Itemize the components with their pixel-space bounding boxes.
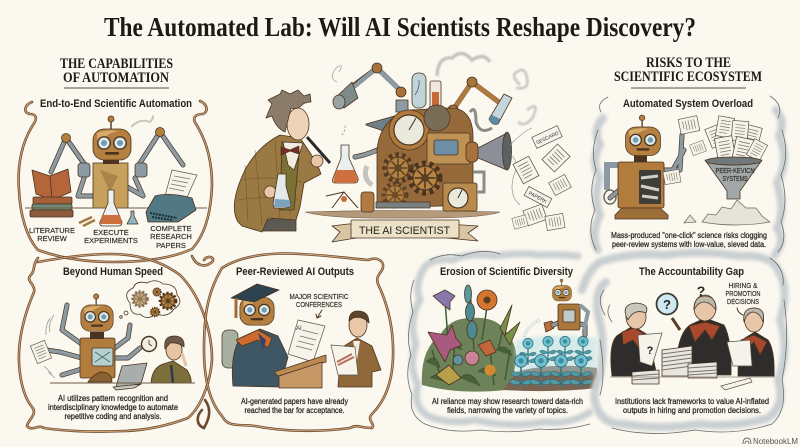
desk line bbox=[50, 382, 195, 384]
icon: paper marked ai: AI bbox=[296, 326, 302, 332]
frame: smoke cloud bbox=[582, 253, 787, 434]
icon: professors examining papers: ? bbox=[663, 297, 671, 312]
panel caption: repetitive coding and analysis. bbox=[64, 412, 162, 421]
label: literature review bbox=[29, 226, 75, 243]
panel caption: reached the bar for acceptance. bbox=[244, 406, 344, 415]
central illustration: the ai scientist bbox=[234, 53, 571, 242]
panel caption: interdisciplinary knowledge to automate bbox=[48, 403, 179, 412]
heading: risks to the scientific ecosystem: SCIENTIFIC ECOSYSTEM bbox=[614, 69, 762, 85]
banner: the ai scientist: THE AI SCIENTIST bbox=[359, 225, 450, 237]
brand: notebooklm: NotebookLM bbox=[753, 437, 798, 446]
label: complete research papers: RESEARCH bbox=[150, 232, 192, 241]
panel: erosion of scientific diversity bbox=[408, 251, 598, 432]
panel: peer-reviewed ai outputs bbox=[192, 254, 393, 431]
icon: scientist bbox=[234, 90, 330, 232]
panel caption: AI-generated papers have already bbox=[241, 397, 348, 406]
label: major scientific conferences bbox=[290, 292, 349, 318]
heading: risks to the scientific ecosystem: RISKS TO THE bbox=[646, 55, 731, 71]
icon: peer-review funnel bbox=[705, 116, 768, 199]
icon: books bbox=[30, 169, 73, 217]
icon: uniform blue seedlings bbox=[503, 335, 598, 391]
panel caption bbox=[241, 397, 348, 415]
panel: end-to-end scientific automation bbox=[19, 98, 212, 262]
panel: beyond human speed bbox=[19, 254, 212, 432]
icon: paper stacks bbox=[632, 346, 752, 390]
label: literature review: LITERATURE bbox=[29, 226, 75, 235]
panel caption: peer-review systems with low-value, sieved data. bbox=[612, 240, 766, 249]
icon: bench bbox=[305, 210, 500, 218]
heading: the capabilities of automation: OF AUTOMATION bbox=[63, 70, 169, 86]
icon: laptop bbox=[113, 363, 147, 390]
icon: multi-armed robot bbox=[51, 116, 183, 208]
label: hiring and promotion decisions bbox=[726, 281, 760, 315]
frame: smoke cloud bbox=[408, 251, 590, 432]
label: literature review: REVIEW bbox=[37, 234, 68, 243]
icon: professors examining papers: ? bbox=[647, 345, 654, 357]
panel caption bbox=[611, 231, 767, 249]
panel caption: fields, narrowing the variety of topics. bbox=[447, 406, 568, 415]
icon: backpack bbox=[222, 330, 238, 368]
icon: diverse wildflower garden bbox=[422, 285, 520, 392]
icon: flying papers bbox=[510, 126, 571, 231]
heading: risks to the scientific ecosystem bbox=[614, 55, 762, 88]
banner: the ai scientist bbox=[332, 220, 478, 242]
icon: typewriter and paper bbox=[146, 170, 197, 222]
icon: watering robot bbox=[524, 279, 588, 337]
icon: peer-review funnel: PEER-KEVICN bbox=[716, 166, 754, 175]
panel caption bbox=[615, 397, 769, 415]
label: complete research papers: PAPERS bbox=[156, 241, 186, 250]
icon: professors examining papers bbox=[611, 283, 774, 376]
label: execute experiments: EXPERIMENTS bbox=[84, 236, 138, 245]
icon: crumpled paper pile bbox=[684, 200, 770, 225]
icon: speed robot bbox=[30, 294, 157, 382]
icon: flask and burner bbox=[326, 124, 392, 212]
panel heading: Erosion of Scientific Diversity bbox=[440, 266, 574, 278]
panel caption: Institutions lack frameworks to value AI-inflated bbox=[615, 397, 769, 406]
label: hiring and promotion decisions: HIRING & bbox=[728, 281, 758, 290]
panel caption: outputs in hiring and promotion decisions. bbox=[623, 406, 761, 415]
frame: beyond human speed bbox=[19, 254, 212, 432]
heading: the capabilities of automation bbox=[60, 56, 173, 88]
icon: flying papers: SESCARD bbox=[535, 130, 560, 146]
steam bbox=[332, 53, 535, 124]
table line bbox=[610, 376, 775, 378]
panel heading: End-to-End Scientific Automation bbox=[40, 98, 192, 110]
panel caption bbox=[48, 394, 179, 421]
panel heading: Automated System Overload bbox=[623, 98, 753, 110]
icon: tired man at desk bbox=[151, 336, 191, 383]
panel caption: Mass-produced "one-click" science risks clogging bbox=[611, 231, 767, 240]
title: The Automated Lab: Will AI Scientists Reshape Discovery? bbox=[104, 11, 696, 42]
label: hiring and promotion decisions: DECISIONS bbox=[727, 297, 759, 306]
label: major scientific conferences: CONFERENCES bbox=[296, 300, 342, 309]
icon: peer-review funnel: SYSTEMS bbox=[722, 174, 748, 183]
panel heading: The Accountability Gap bbox=[639, 266, 744, 278]
panel heading: Peer-Reviewed AI Outputs bbox=[236, 266, 354, 278]
panel heading: Beyond Human Speed bbox=[63, 266, 163, 278]
icon: professors examining papers: ? bbox=[697, 283, 705, 299]
label: complete research papers bbox=[150, 224, 192, 250]
label: execute experiments: EXECUTE bbox=[93, 228, 129, 237]
panel: automated system overload bbox=[591, 96, 786, 255]
label: hiring and promotion decisions: PROMOTION bbox=[726, 289, 760, 298]
icon: robot in graduation gown bbox=[231, 284, 288, 387]
panel: the accountability gap bbox=[582, 253, 787, 434]
label: major scientific conferences: MAJOR SCIENTIFIC bbox=[290, 292, 349, 301]
panel caption: AI reliance may show research toward data-rich bbox=[432, 397, 583, 406]
label: execute experiments bbox=[84, 228, 138, 245]
icon: podium bbox=[274, 355, 326, 388]
frame: smoke cloud bbox=[591, 96, 786, 255]
icon: steampunk machine bbox=[333, 63, 512, 211]
icon: surprised man with rejected paper bbox=[331, 311, 381, 387]
icon: flask bbox=[79, 190, 138, 226]
label: complete research papers: COMPLETE bbox=[150, 224, 192, 233]
panel caption bbox=[432, 397, 583, 415]
table line bbox=[25, 207, 207, 209]
frame: peer-reviewed outputs bbox=[192, 254, 393, 431]
icon: paper marked ai bbox=[288, 320, 325, 362]
icon: thought bubble with gears bbox=[120, 281, 180, 318]
icon: paper-shredding robot bbox=[604, 115, 706, 219]
frame: end-to-end panel bbox=[19, 101, 212, 262]
panel caption: AI utilizes pattern recognition and bbox=[58, 394, 168, 403]
icon: flying papers: PAPERK bbox=[527, 191, 548, 206]
heading: the capabilities of automation: THE CAPABILITIES bbox=[60, 56, 173, 72]
